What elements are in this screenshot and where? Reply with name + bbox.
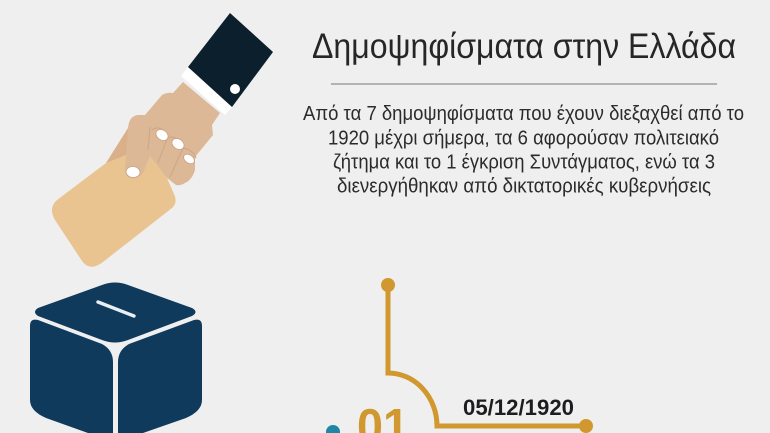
icon: shirt cuff [181,67,232,115]
ballot box right face [118,320,202,433]
icon: ballot paper [52,146,176,267]
intro text block: Από τα 7 δημοψηφίσματα που έχουν διεξαχθεί από το [303,103,744,125]
intro text block: διενεργήθηκαν από δικτατορικές κυβερνήσεις [337,176,711,198]
icon: hand [125,82,220,185]
icon: ballot box [30,282,202,433]
timeline date: 05/12/1920 [463,395,574,420]
intro text block: 1920 μέχρι σήμερα, τα 6 αφορούσαν πολιτειακό [328,128,719,150]
illustration: hand holding a ballot [52,13,273,267]
icon: finger creases [148,127,196,177]
ballot slot [98,302,134,316]
icon: fingernails [126,127,196,178]
ballot box left face [30,320,113,433]
intro text block [303,103,744,198]
title: Δημοψηφίσματα στην Ελλάδα [312,27,736,66]
icon: jacket sleeve [188,13,273,107]
icon: palm edge behind ballot [106,128,135,170]
icon: sleeve button [230,84,240,94]
intro text block: ζήτημα και το 1 έγκριση Συντάγματος, ενώ τα 3 [333,152,715,174]
ballot box lid [35,282,196,342]
divider [331,84,717,85]
timeline teal marker [326,425,340,433]
timeline connector [384,280,590,430]
